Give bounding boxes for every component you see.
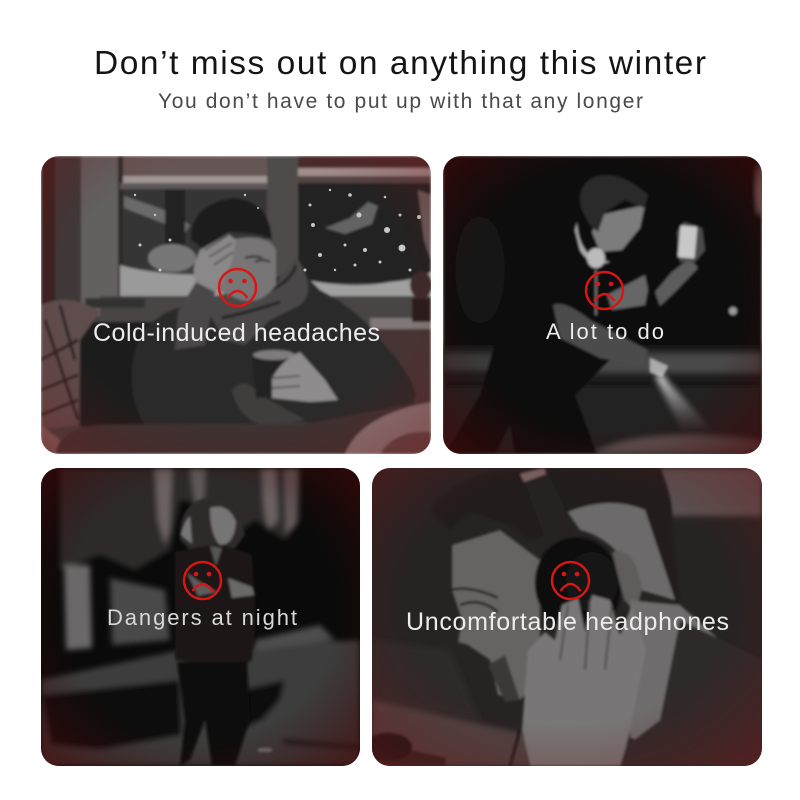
subtitle: You don’t have to put up with that any longer xyxy=(158,90,643,113)
title: Don’t miss out on anything this winter xyxy=(94,45,706,82)
label: uncomfortable headphones: Uncomfortable headphones xyxy=(406,608,729,636)
panel: a lot to do xyxy=(443,156,765,454)
label: dangers at night: Dangers at night xyxy=(107,605,297,630)
icon: sad face xyxy=(586,272,623,309)
photo: frightened woman on a dark street xyxy=(41,468,360,766)
panel: cold-induced headaches xyxy=(41,156,432,454)
icon: sad face xyxy=(552,562,589,599)
photo: man with headache by a snowy window xyxy=(41,156,432,454)
photo: man adjusting headphones xyxy=(364,468,762,766)
panel: dangers at night xyxy=(41,468,360,766)
icon: sad face xyxy=(219,269,256,306)
icon: sad face xyxy=(184,562,221,599)
photo: man rushing with phone and flashlight at night xyxy=(443,156,765,454)
label: cold-induced headaches: Cold-induced headaches xyxy=(93,319,380,347)
label: a lot to do: A lot to do xyxy=(546,319,664,344)
panel: uncomfortable headphones xyxy=(364,468,762,766)
